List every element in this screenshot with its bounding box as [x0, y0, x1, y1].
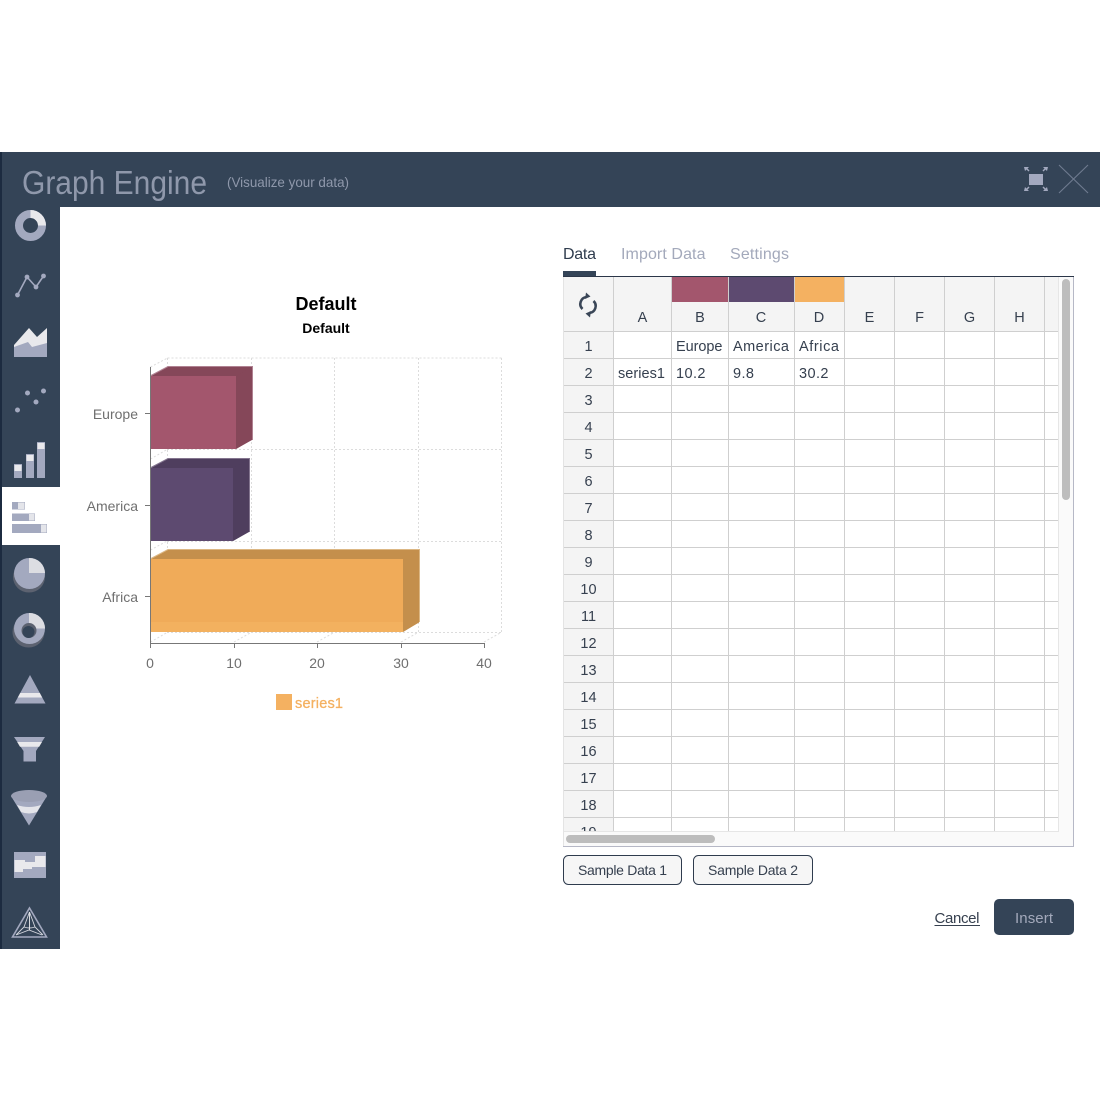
column headers: B [695, 310, 705, 326]
row numbers: 7 [584, 501, 593, 517]
value axis labels: 0 [146, 655, 154, 671]
data cells: 10.2 [676, 366, 706, 382]
row numbers: 17 [580, 771, 597, 787]
row numbers: 5 [584, 447, 593, 463]
link: Cancel: Cancel [934, 910, 980, 927]
column headers: G [964, 310, 975, 326]
row numbers: 1 [584, 339, 593, 355]
row numbers: 11 [581, 609, 596, 625]
legend [276, 694, 343, 712]
column headers [638, 310, 1025, 326]
data cells: 9.8 [733, 366, 754, 382]
row numbers: 12 [580, 636, 597, 652]
data cells: 30.2 [799, 366, 828, 382]
row numbers: 4 [584, 420, 593, 436]
column headers: H [1014, 310, 1025, 326]
chart grid [150, 358, 502, 642]
bar: America 9.8 [151, 458, 250, 541]
row numbers: 14 [580, 690, 597, 706]
row numbers: 13 [580, 663, 597, 679]
icon: heatmap block [14, 852, 46, 878]
column headers: D [814, 310, 824, 326]
value axis labels: 20 [309, 655, 325, 671]
category axis labels: Africa [102, 589, 138, 605]
row numbers: 18 [580, 798, 597, 814]
icon: scatter chart [15, 388, 46, 412]
data cells: America [733, 339, 790, 355]
icon: refresh [580, 292, 596, 318]
tabs: Import Data [621, 246, 706, 263]
panel: chart type sidebar [0, 207, 60, 949]
value axis labels: 10 [226, 655, 242, 671]
icon: funnel chart [14, 737, 45, 762]
column headers: F [915, 310, 924, 326]
icon: 3D column chart [14, 442, 45, 478]
row numbers: 10 [580, 582, 597, 598]
row numbers: 3 [584, 393, 593, 409]
title: Graph Engine [22, 164, 207, 201]
vertical scrollbar [1062, 279, 1070, 500]
data cells [618, 339, 840, 382]
icon: close [1059, 165, 1088, 193]
button: Sample Data 2 [694, 856, 812, 884]
row numbers: 8 [584, 528, 593, 544]
data cells: Africa [799, 339, 840, 355]
panel: spreadsheet [563, 276, 1074, 847]
row numbers: 2 [584, 366, 593, 382]
icon: 3D pie chart [13, 558, 45, 592]
column headers: E [865, 310, 875, 326]
axes [145, 367, 484, 648]
column headers: A [638, 310, 648, 326]
button: Sample Data 1: Sample Data 1 [578, 862, 667, 878]
clipped row 19 number: 19 [580, 825, 597, 841]
data cells: series1 [618, 366, 665, 382]
button: Sample Data 1 [564, 856, 682, 884]
row numbers [580, 339, 597, 814]
value axis labels: 40 [476, 655, 492, 671]
tabs [563, 246, 789, 276]
chart title: Default [295, 294, 357, 314]
panel: 3D bar chart [87, 294, 502, 712]
value axis labels [146, 655, 492, 671]
category axis labels: America [87, 498, 138, 514]
subtitle: (Visualize your data) [227, 174, 349, 190]
row numbers: 16 [580, 744, 597, 760]
series colour swatches [672, 277, 844, 302]
horizontal scrollbar [566, 835, 715, 843]
icon: 3D funnel cone [11, 790, 47, 826]
tabs: Data [563, 246, 596, 263]
row numbers: 9 [584, 555, 593, 571]
category axis labels: Europe [93, 406, 138, 422]
icon: line chart [16, 274, 45, 297]
panel: header bar [0, 152, 1100, 207]
category axis labels [87, 406, 138, 605]
bar: Africa 30.2 [151, 550, 420, 632]
button: Sample Data 2: Sample Data 2 [708, 862, 798, 878]
button: Insert: Insert [1015, 910, 1054, 927]
column headers: C [756, 310, 766, 326]
icon: 3D donut chart [12, 613, 45, 648]
row numbers: 15 [580, 717, 597, 733]
icon: 3D tetrahedron [12, 908, 46, 937]
icon: pyramid chart [14, 675, 46, 704]
button: Insert [994, 899, 1074, 935]
icon: fullscreen [1024, 167, 1048, 191]
grid lines [564, 277, 1058, 831]
legend: series1 [295, 696, 343, 712]
value axis labels: 30 [393, 655, 409, 671]
icon: area chart [14, 328, 47, 357]
bar: Europe 10.2 [151, 366, 252, 449]
chart subtitle: Default [302, 320, 350, 336]
tabs: Settings [730, 246, 789, 263]
row numbers: 6 [584, 474, 593, 490]
icon: 3D bar chart (active) [12, 502, 47, 533]
data cells: Europe [676, 339, 722, 355]
icon: donut chart [19, 210, 46, 237]
